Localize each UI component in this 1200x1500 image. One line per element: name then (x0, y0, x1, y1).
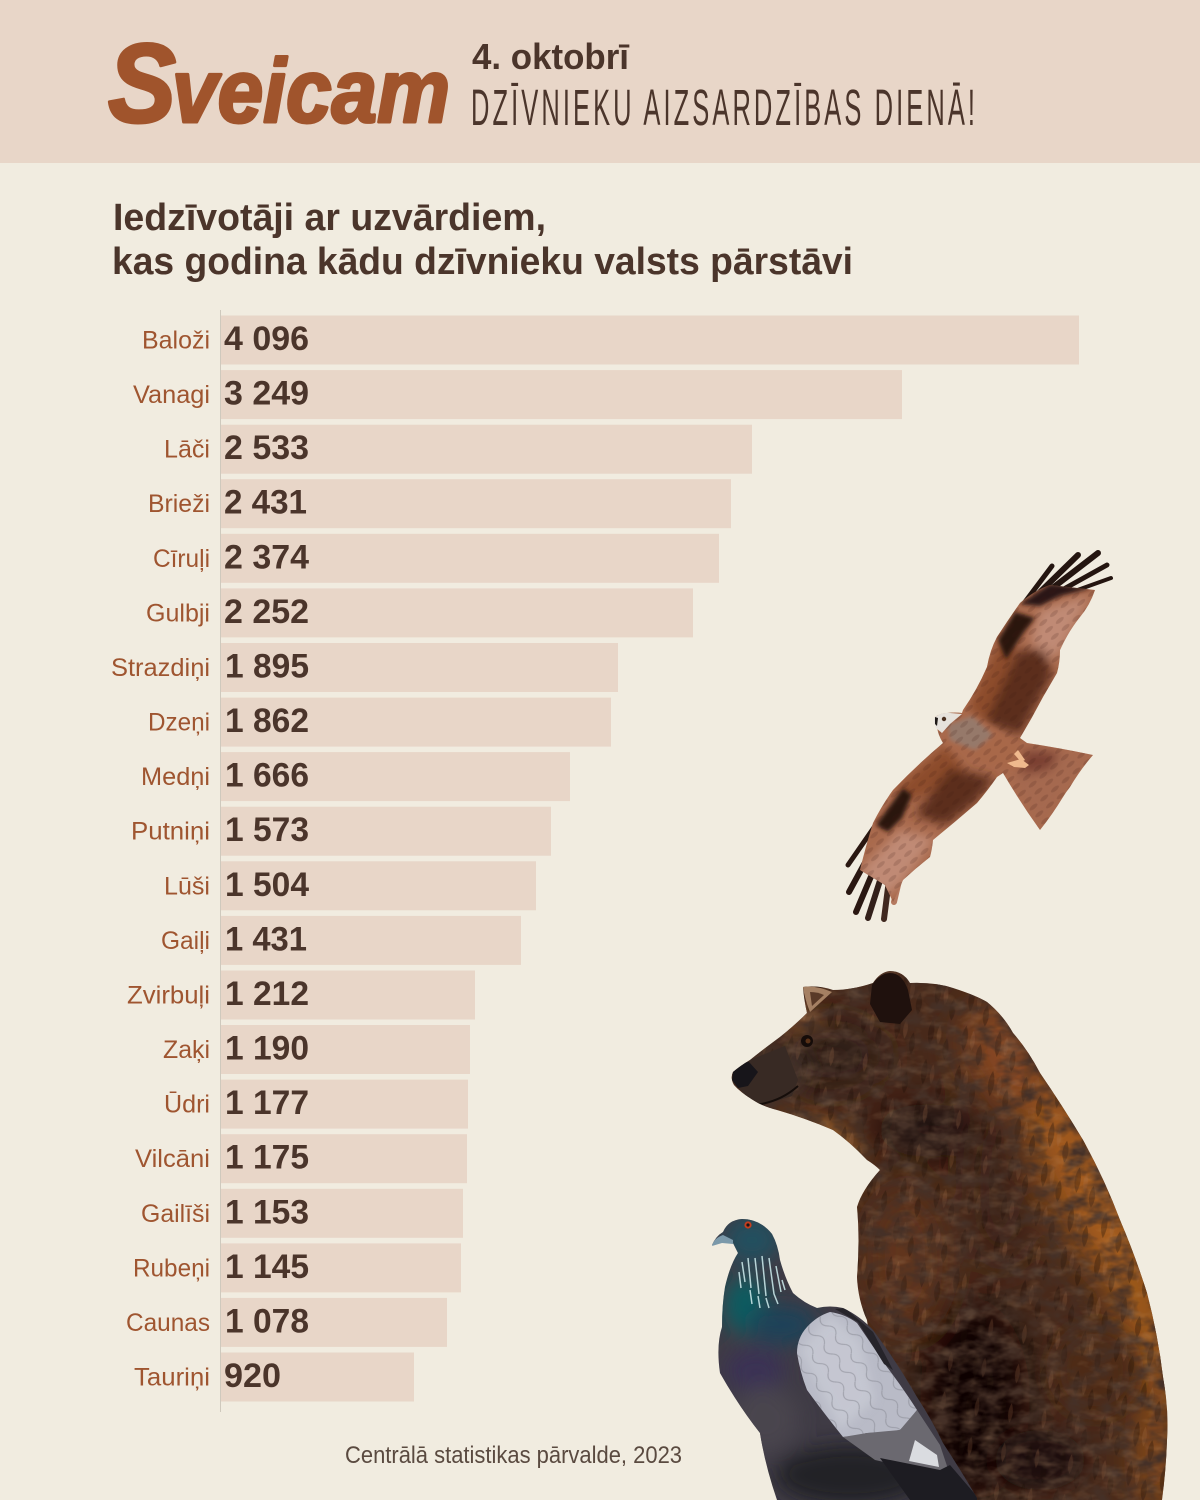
date: 4. oktobrī (472, 36, 630, 77)
bar: Baloži: Baloži (142, 326, 210, 354)
head (934, 713, 962, 733)
bar: Gailīši: Gailīši (141, 1200, 210, 1228)
bar: Zvirbuļi: 1 212 (225, 975, 309, 1013)
feet (1007, 750, 1029, 768)
bar: Zaķi: Zaķi (163, 1036, 210, 1064)
bar: Baloži (142, 316, 1079, 364)
bar: Dzeņi: 1 862 (225, 702, 309, 740)
bar: Gaiļi: Gaiļi (161, 927, 210, 955)
bar: Gulbji: Gulbji (146, 599, 210, 627)
bar: Dzeņi (148, 698, 611, 747)
bar: Vanagi: 3 249 (224, 375, 309, 413)
bar: Zaķi: 1 190 (225, 1030, 309, 1068)
bar: Lāči: 2 533 (224, 429, 309, 467)
bar: Ūdri (164, 1080, 468, 1129)
eye and beak (744, 1221, 752, 1229)
bar: Cīruļi: Cīruļi (153, 545, 210, 573)
occasion: DZĪVNIEKU AIZSARDZĪBAS DIENĀ! (471, 79, 975, 136)
wing tones (860, 595, 1092, 900)
bar: Lūši: 1 504 (225, 866, 309, 904)
bar: Lāči (164, 425, 752, 474)
bar: Gailīši (141, 1189, 463, 1238)
bar: Putniņi: 1 573 (225, 811, 309, 849)
wing (797, 1312, 917, 1437)
bar: Caunas: 1 078 (225, 1302, 309, 1340)
bar: Brieži: 2 431 (224, 484, 307, 522)
chart title: Iedzīvotāji ar uzvārdiem, (113, 197, 546, 239)
bar: Tauriņi: 920 (224, 1357, 281, 1395)
greeting word (108, 21, 450, 146)
bar: Caunas: Caunas (126, 1309, 210, 1337)
plumage tones (723, 1216, 925, 1500)
bar: Strazdiņi: 1 895 (225, 648, 309, 686)
source note: Centrālā statistikas pārvalde, 2023 (345, 1442, 682, 1469)
bar: Putniņi (131, 807, 551, 856)
bar: Strazdiņi: Strazdiņi (111, 654, 210, 682)
bar: Zvirbuļi (127, 970, 475, 1020)
bar: Vilcāni (135, 1134, 467, 1183)
bar: Medņi: 1 666 (225, 757, 309, 795)
illustration: brown bear (725, 965, 1186, 1500)
bar: Vanagi (133, 370, 902, 419)
fur tones (775, 990, 1186, 1500)
bar: Lāči: Lāči (164, 436, 210, 464)
muzzle (733, 1046, 798, 1106)
primary feathers, lower wing (848, 826, 902, 919)
bar: Zvirbuļi: Zvirbuļi (127, 982, 210, 1010)
bar: Vanagi: Vanagi (133, 381, 210, 409)
chart title: kas godina kādu dzīvnieku valsts pārstāvi (112, 241, 853, 283)
bar: Brieži: Brieži (148, 490, 210, 518)
bar: Baloži: 4 096 (224, 320, 309, 358)
bar: Cīruļi (153, 534, 719, 583)
bar: Gulbji (146, 588, 693, 637)
bar: Putniņi: Putniņi (131, 818, 210, 846)
bar: Tauriņi (134, 1352, 414, 1402)
chart title (112, 197, 853, 283)
primary feathers, upper wing (1022, 553, 1111, 606)
bar: Rubeņi (133, 1243, 461, 1292)
bar: Dzeņi: Dzeņi (148, 709, 210, 737)
bar: Brieži (148, 479, 731, 528)
bar: Cīruļi: 2 374 (224, 538, 309, 576)
bar: Gaiļi: 1 431 (225, 920, 307, 958)
bar: Gaiļi (161, 916, 521, 965)
header band (0, 0, 1200, 163)
bar: Strazdiņi (111, 643, 618, 692)
bar: Lūši: Lūši (164, 872, 210, 900)
greeting word: veicam (172, 42, 450, 142)
neck shimmer (739, 1256, 785, 1308)
bar: Tauriņi: Tauriņi (134, 1364, 210, 1392)
greeting word: S (108, 21, 176, 146)
illustration: rock pigeon (705, 1210, 985, 1500)
illustration: red kite (840, 545, 1120, 925)
bar: Rubeņi: Rubeņi (133, 1254, 210, 1282)
bar chart (111, 310, 1079, 1412)
bar: Gulbji: 2 252 (224, 593, 309, 631)
bar: Ūdri: Ūdri (164, 1091, 210, 1119)
bar: Zaķi (163, 1025, 470, 1074)
bar: Ūdri: 1 177 (225, 1084, 309, 1122)
bar: Rubeņi: 1 145 (225, 1248, 309, 1286)
ears (803, 987, 832, 1012)
bar: Medņi (141, 752, 570, 801)
bar: Lūši (164, 861, 536, 910)
bar: Vilcāni: 1 175 (225, 1139, 309, 1177)
bar: Vilcāni: Vilcāni (135, 1145, 210, 1173)
bar: Medņi: Medņi (141, 763, 210, 791)
bar: Gailīši: 1 153 (225, 1193, 309, 1231)
bar: Caunas (126, 1298, 447, 1347)
